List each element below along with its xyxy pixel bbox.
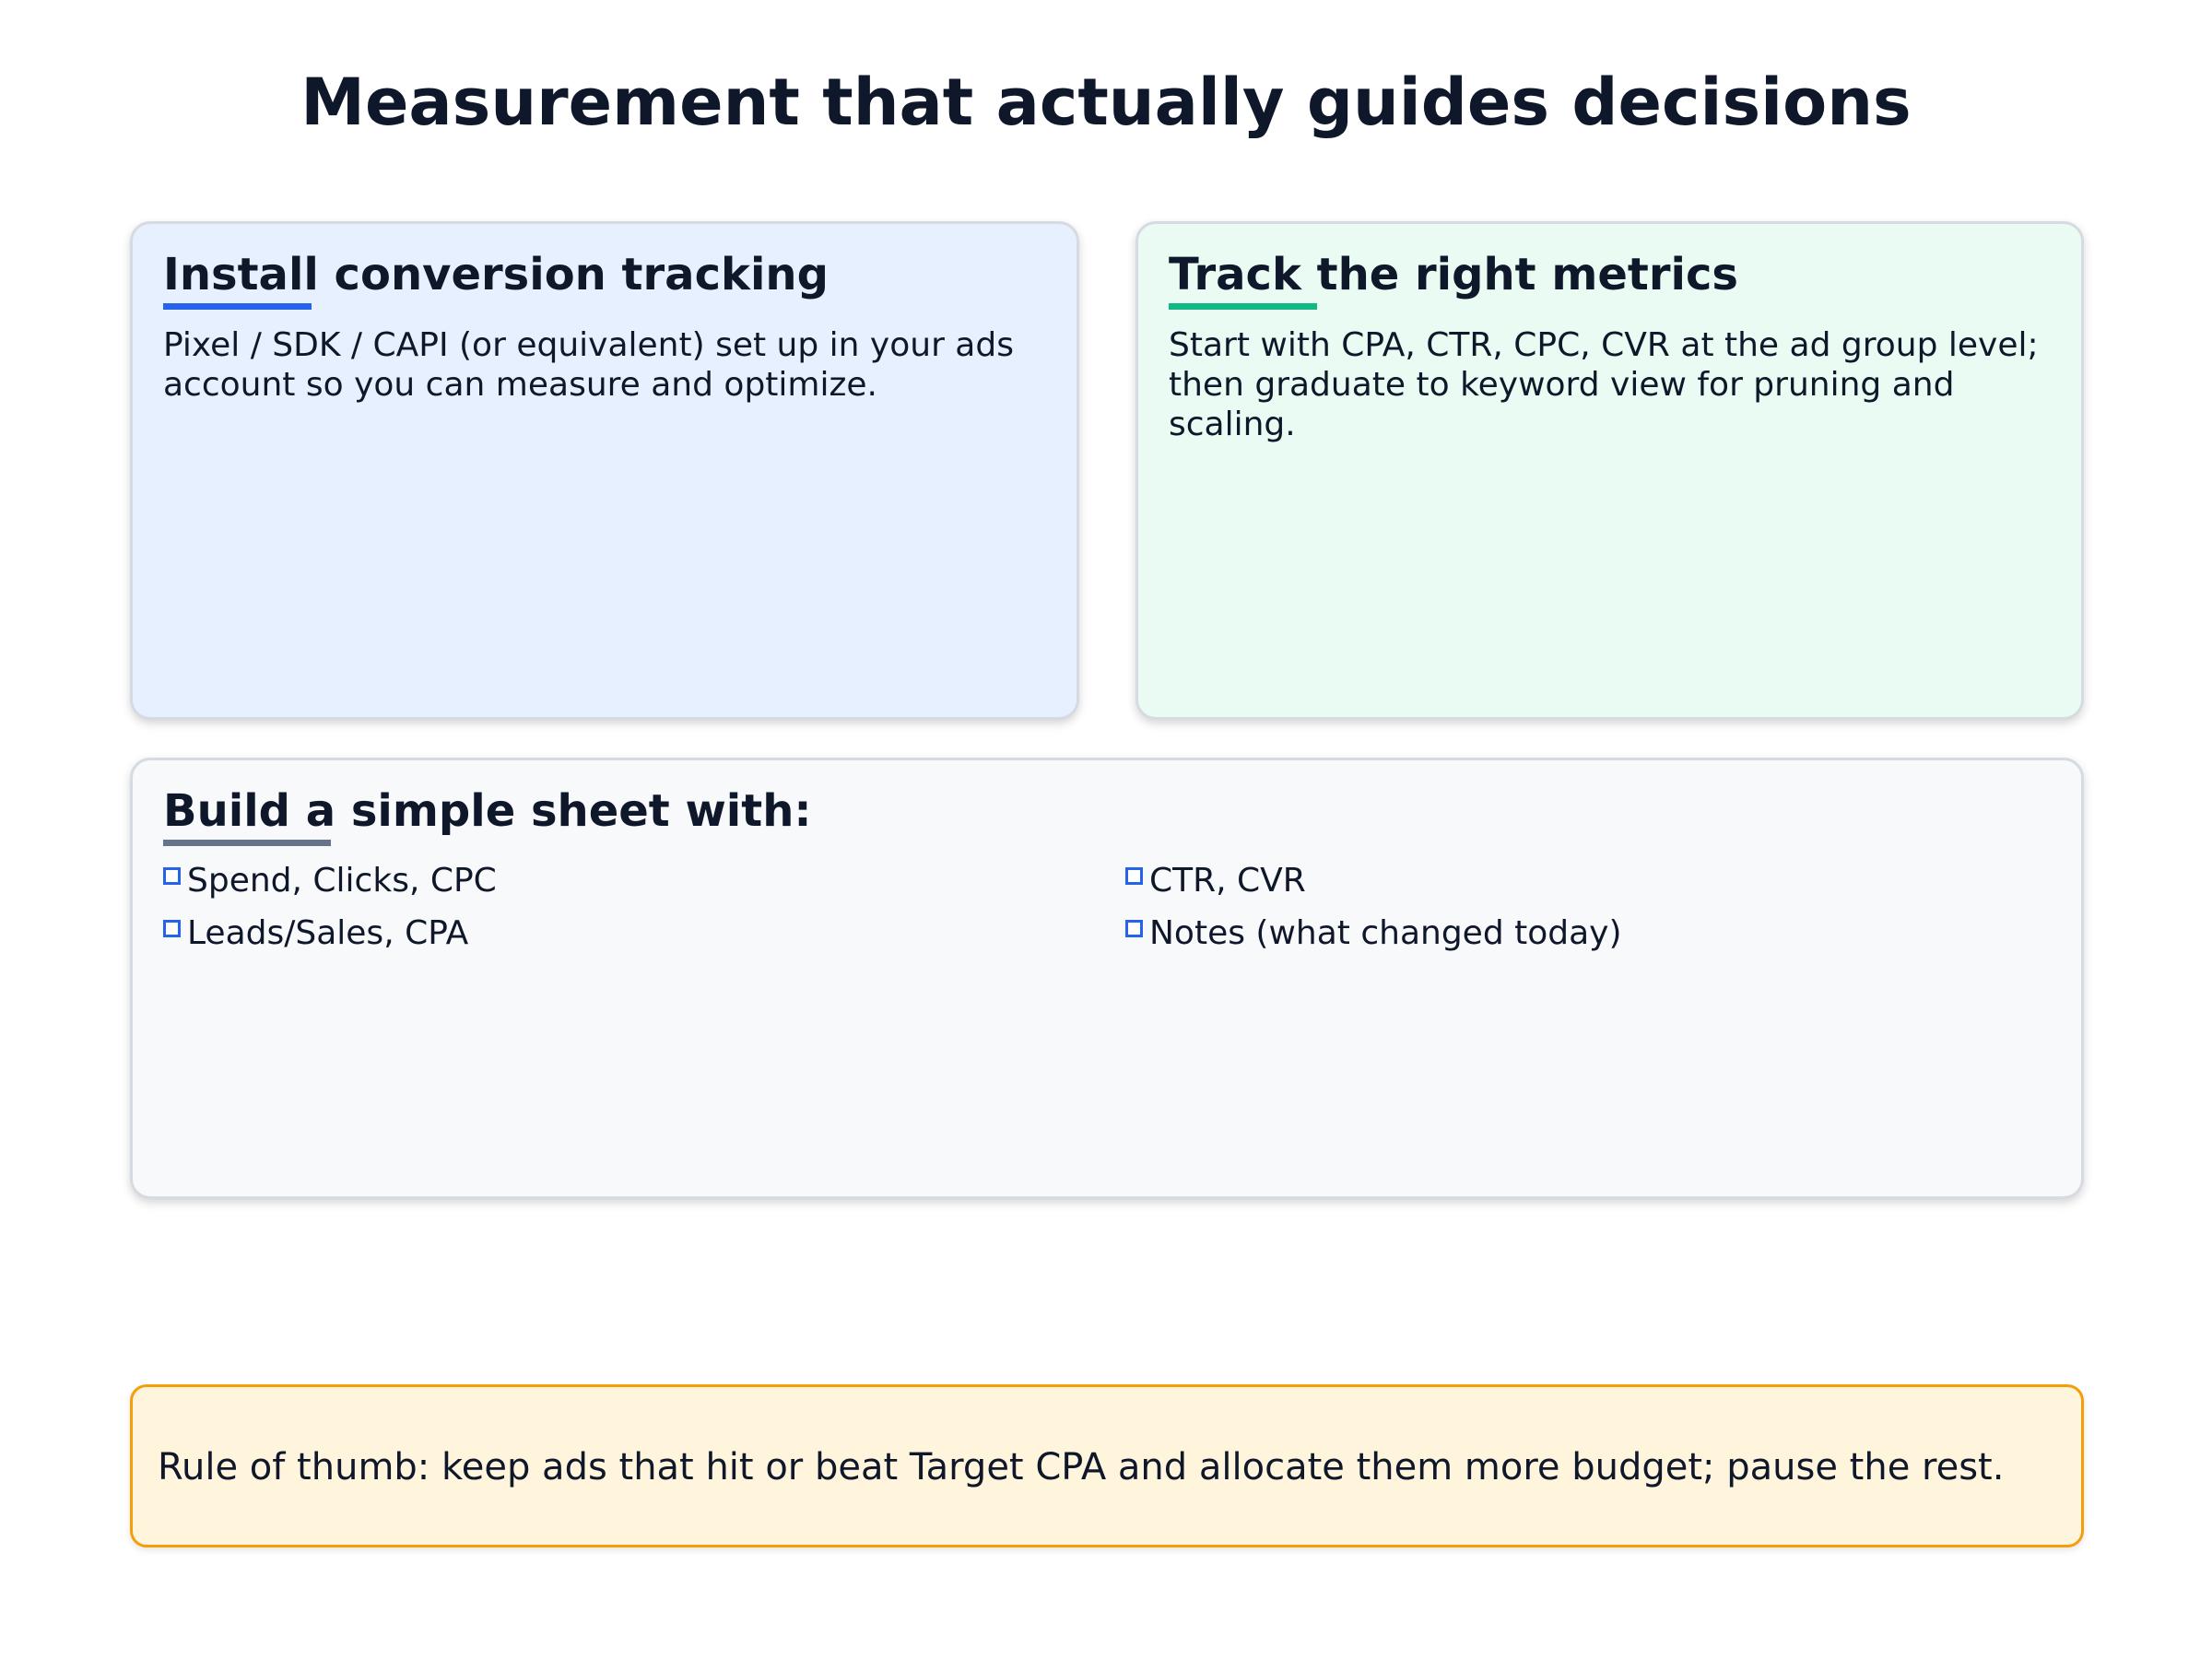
callout text: Rule of thumb: keep ads that hit or beat Target CPA and allocate them more budget; pause the rest. xyxy=(158,1446,2004,1488)
panel: build a simple sheet xyxy=(130,758,2084,1199)
panel: track the right metrics xyxy=(1135,221,2084,720)
heading: Install conversion tracking xyxy=(163,249,829,300)
bullet: spend: Spend, Clicks, CPC xyxy=(187,862,497,900)
title: Measurement that actually guides decisions xyxy=(300,65,1912,140)
underline accent xyxy=(163,840,331,846)
callout: rule of thumb xyxy=(130,1384,2084,1547)
text block: Start with CPA, CTR, CPC, CVR at the ad group level; then graduate to keyword view for pruning and scaling. xyxy=(1169,326,2039,443)
heading: Track the right metrics xyxy=(1169,249,1738,300)
bullet: ctr: CTR, CVR xyxy=(1149,862,1306,900)
bullet: leads: Leads/Sales, CPA xyxy=(187,914,468,952)
underline accent xyxy=(163,303,312,310)
text block: Pixel / SDK / CAPI (or equivalent) set up in your ads account so you can measure and optimize. xyxy=(163,326,1014,404)
bullet: notes: Notes (what changed today) xyxy=(1149,914,1622,952)
heading: Build a simple sheet with: xyxy=(163,785,812,837)
bullet list xyxy=(163,862,1622,952)
underline accent xyxy=(1169,303,1317,310)
panel: install conversion tracking xyxy=(130,221,1079,720)
